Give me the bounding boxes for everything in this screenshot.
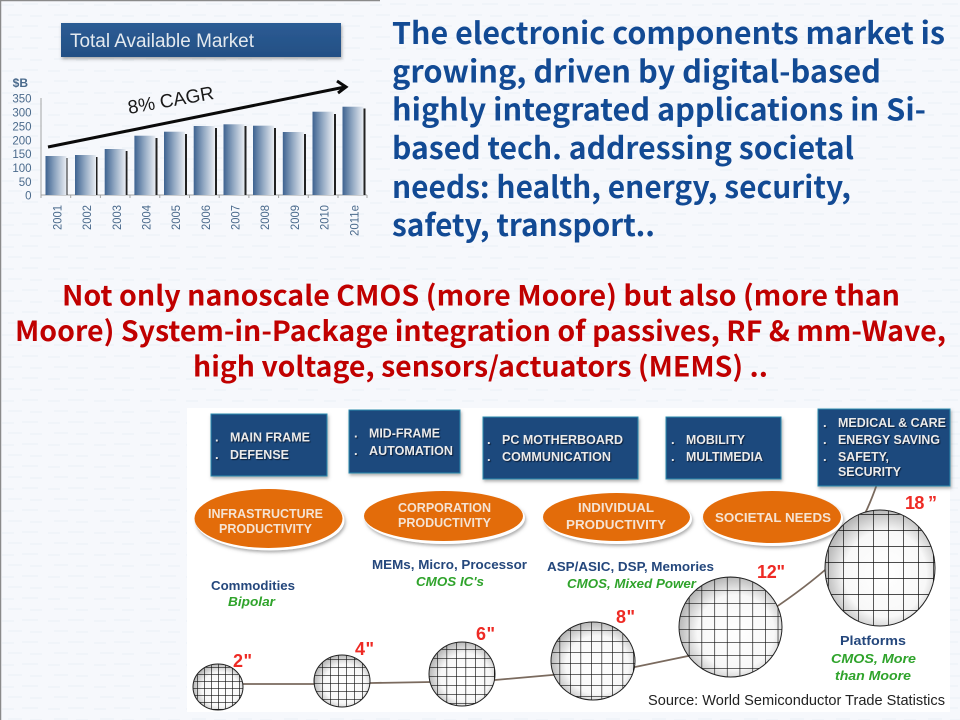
box: mobility xyxy=(666,417,781,479)
box: medical: . xyxy=(823,415,827,430)
box: medical: MEDICAL & CARE xyxy=(838,415,946,430)
box: pc motherboard: COMMUNICATION xyxy=(502,449,611,464)
chart title: Total Available Market xyxy=(70,31,255,52)
box: medical: SAFETY, xyxy=(838,449,889,464)
ellipse: corporation productivity xyxy=(364,491,525,544)
heading: red statement xyxy=(15,274,946,384)
heading: market text: needs: health, energy, security, xyxy=(392,163,851,207)
box: medical: . xyxy=(823,432,827,447)
label: platforms: Platforms xyxy=(840,633,906,648)
box: main frame: DEFENSE xyxy=(230,447,289,462)
ellipse: societal needs: SOCIETAL NEEDS xyxy=(715,510,831,525)
wafer 2 inch xyxy=(193,651,252,710)
box: mobility: . xyxy=(671,432,675,447)
box: mid-frame xyxy=(349,410,460,473)
label: commodities xyxy=(211,578,295,609)
ellipse: infrastructure productivity: INFRASTRUCTURE xyxy=(208,506,323,521)
wafer 4 inch: 4" xyxy=(355,639,374,659)
ellipse: corporation productivity: CORPORATION xyxy=(398,500,491,515)
label: platforms xyxy=(831,633,916,683)
box: medical xyxy=(818,409,950,486)
heading: market text: highly integrated applications in Si- xyxy=(392,86,926,130)
box: main frame: . xyxy=(215,447,219,462)
label: mems xyxy=(372,557,527,589)
label: asp: ASP/ASIC, DSP, Memories xyxy=(547,559,714,574)
wafer 6 inch: 6" xyxy=(476,624,495,644)
roadmap background xyxy=(187,408,950,712)
year labels: 2002 xyxy=(82,205,94,230)
y axis labels: $B xyxy=(13,76,28,90)
box: mid-frame: . xyxy=(354,443,358,458)
ellipse: infrastructure productivity xyxy=(194,489,344,550)
ellipse: individual productivity xyxy=(543,493,692,544)
box: pc motherboard xyxy=(483,417,638,479)
box: main frame: . xyxy=(215,430,219,444)
y axis labels: 0 xyxy=(25,190,32,202)
label: commodities: Bipolar xyxy=(228,594,276,609)
box: mid-frame: . xyxy=(354,426,358,440)
bars xyxy=(46,107,366,195)
box: pc motherboard: . xyxy=(487,449,491,464)
y axis labels: 350 xyxy=(12,94,32,106)
heading: market text xyxy=(392,9,945,245)
CAGR arrow xyxy=(48,81,346,147)
wafer 12 inch: 12" xyxy=(757,562,785,582)
slide border xyxy=(0,0,380,720)
ellipse: societal needs xyxy=(703,491,843,546)
CAGR label: 8% CAGR xyxy=(126,83,216,119)
year labels: 2005 xyxy=(171,205,183,230)
wafer 18 inch xyxy=(825,493,937,626)
wafer 12 inch xyxy=(679,562,785,677)
year labels: 2008 xyxy=(260,205,272,230)
year labels: 2004 xyxy=(142,204,154,230)
year labels: 2009 xyxy=(290,205,302,230)
label: mems: MEMs, Micro, Processor xyxy=(372,557,527,572)
box: medical: ENERGY SAVING xyxy=(838,432,940,447)
bar chart xyxy=(12,76,367,236)
heading: red statement: high voltage, sensors/actuators (MEMS) .. xyxy=(193,344,768,384)
wafer 2 inch: 2" xyxy=(233,651,252,671)
label: platforms: CMOS, More xyxy=(831,651,916,666)
year labels: 2010 xyxy=(320,205,332,230)
label: commodities: Commodities xyxy=(211,578,295,593)
year labels: 2001 xyxy=(52,205,64,230)
wafer 8 inch xyxy=(551,607,635,700)
y axis labels: 300 xyxy=(12,108,32,120)
wafer 8 inch: 8" xyxy=(616,607,635,627)
label: asp: CMOS, Mixed Power xyxy=(567,576,697,591)
year labels: 2011e xyxy=(350,205,362,236)
growth curve xyxy=(240,484,877,684)
box: mobility: MOBILITY xyxy=(686,432,745,447)
label: platforms: than Moore xyxy=(835,668,911,683)
wafer 6 inch xyxy=(429,624,495,706)
ellipse: corporation productivity: PRODUCTIVITY xyxy=(398,515,491,530)
y axis labels: 150 xyxy=(12,149,32,161)
box: mid-frame: AUTOMATION xyxy=(369,443,453,458)
wafer 4 inch xyxy=(314,639,374,707)
box: medical: SECURITY xyxy=(838,464,901,479)
panel: market chart xyxy=(12,23,367,236)
box: medical: . xyxy=(823,449,827,464)
wafer 18 inch: 18 ” xyxy=(905,493,937,513)
ellipse: individual productivity: INDIVIDUAL xyxy=(578,500,654,515)
box: pc motherboard: PC MOTHERBOARD xyxy=(502,432,623,447)
year labels: 2006 xyxy=(201,205,213,230)
label: asp xyxy=(547,559,714,591)
y axis labels: 50 xyxy=(19,177,32,189)
ellipse: infrastructure productivity: PRODUCTIVITY xyxy=(219,521,312,536)
y axis labels: 250 xyxy=(12,122,32,134)
y axis labels: 100 xyxy=(12,163,32,175)
panel: roadmap diagram xyxy=(187,408,950,712)
heading: red statement: Moore) System-in-Package integration of passives, RF & mm-Wave, xyxy=(15,309,946,349)
heading: market text: based tech. addressing societal xyxy=(392,124,854,168)
year labels: 2003 xyxy=(112,205,124,230)
heading: market text: safety, transport.. xyxy=(392,201,655,245)
chart title xyxy=(61,23,341,57)
box: pc motherboard: . xyxy=(487,432,491,447)
year labels: 2007 xyxy=(230,205,242,230)
box: main frame: MAIN FRAME xyxy=(230,430,310,444)
ellipse: individual productivity: PRODUCTIVITY xyxy=(566,517,666,532)
source note: Source: World Semiconductor Trade Statistics xyxy=(648,693,945,709)
year labels xyxy=(52,204,362,236)
y axis labels xyxy=(12,76,32,202)
heading: market text: The electronic components market is xyxy=(392,9,945,53)
box: main frame xyxy=(211,414,327,476)
box: mid-frame: MID-FRAME xyxy=(369,426,440,440)
label: mems: CMOS IC's xyxy=(416,574,484,589)
heading: red statement: Not only nanoscale CMOS (more Moore) but also (more than xyxy=(62,274,900,314)
box: mobility: . xyxy=(671,449,675,464)
y axis labels: 200 xyxy=(12,136,32,148)
box: mobility: MULTIMEDIA xyxy=(686,449,764,464)
heading: market text: growing, driven by digital-based xyxy=(392,48,881,92)
